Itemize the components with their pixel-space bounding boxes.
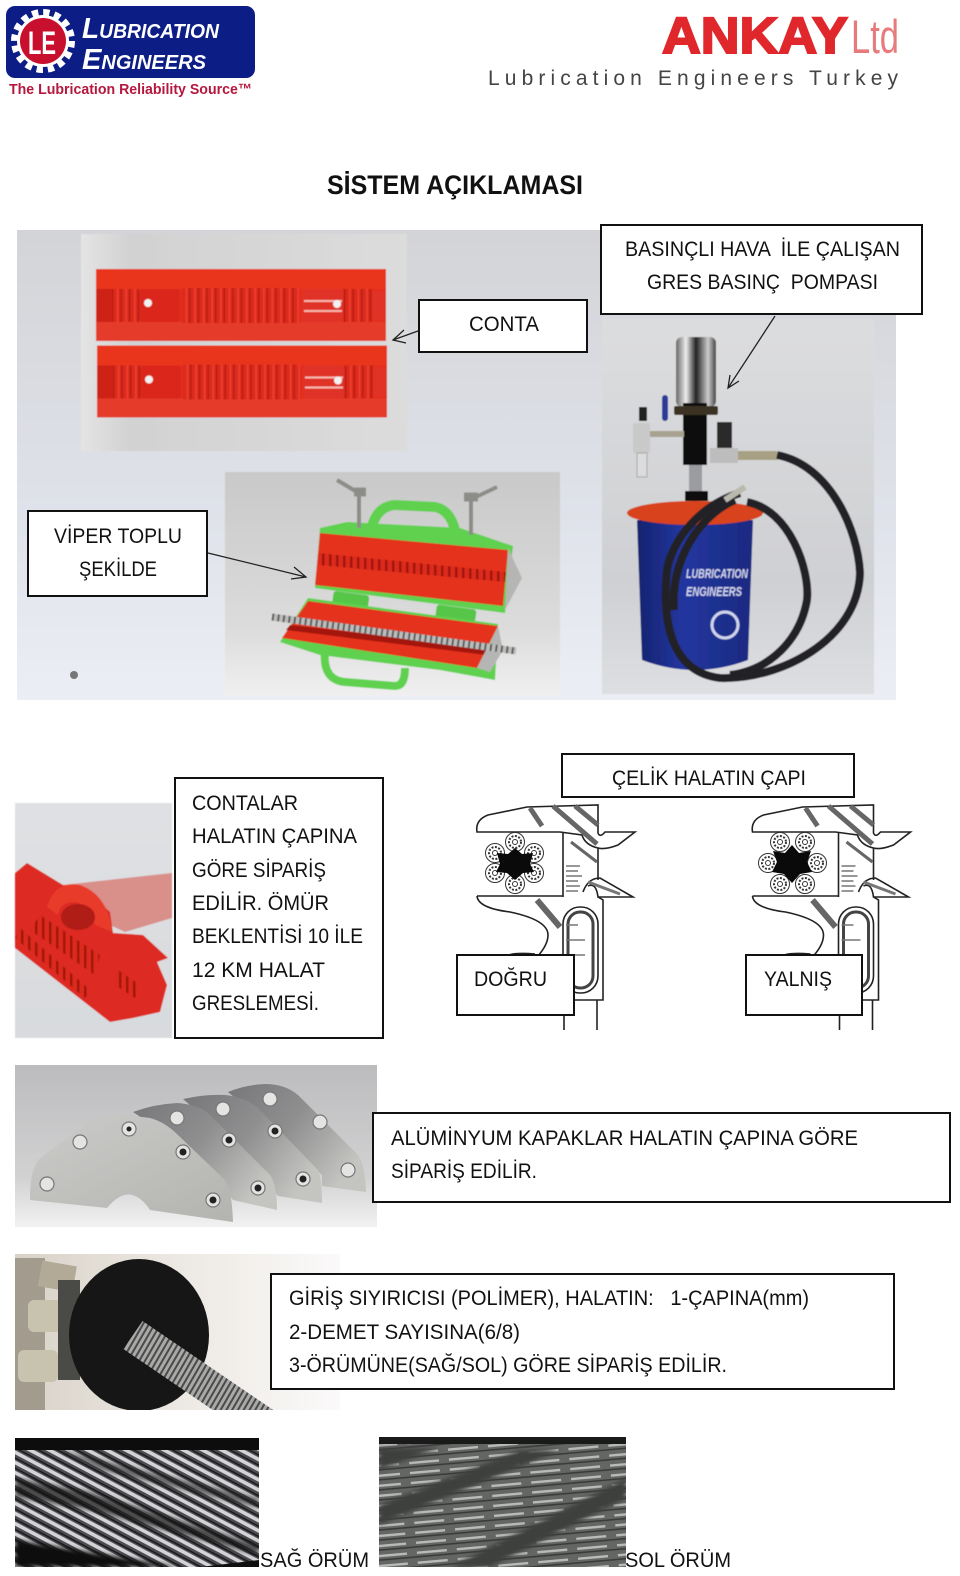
logo: Ankay Ltd: ANKAY xyxy=(662,7,848,64)
logo: Ankay Ltd xyxy=(488,7,899,90)
photo: seal housing with rope xyxy=(225,472,560,696)
black disc xyxy=(69,1259,209,1411)
photo: grease pump xyxy=(602,319,874,694)
outlet block xyxy=(710,448,738,463)
callout: viper xyxy=(28,511,207,596)
callout: conta xyxy=(419,300,587,352)
callout: seals: CONTALAR xyxy=(192,792,298,815)
callout: entry scraper: 2-DEMET SAYISINA(6/8) xyxy=(289,1321,520,1344)
pink back cylinder xyxy=(63,873,172,932)
arrow: conta xyxy=(393,330,418,343)
bucket xyxy=(637,520,753,670)
logo: Ankay Ltd: Lubrication Engineers Turkey xyxy=(488,67,898,90)
steel rope on housing xyxy=(272,617,516,651)
label: left lay: SOL ÖRÜM xyxy=(625,1549,731,1572)
logo: Ankay Ltd: Ltd xyxy=(851,10,899,63)
title: SİSTEM AÇIKLAMASI xyxy=(327,170,583,200)
callout: viper: ŞEKİLDE xyxy=(79,558,157,581)
panel background xyxy=(17,230,896,700)
red seal body xyxy=(15,863,168,1022)
label: right lay: SAĞ ÖRÜM xyxy=(260,1549,369,1572)
callout: seals xyxy=(175,778,383,1038)
cover holes xyxy=(40,1092,355,1207)
logo: Lubrication Engineers: LE xyxy=(28,25,56,61)
photo: grease pump: ENGINEERS xyxy=(686,584,742,599)
logo: Lubrication Engineers: ENGINEERS xyxy=(82,44,207,76)
red seal upper xyxy=(96,269,386,341)
callout: viper: VİPER TOPLU xyxy=(54,525,182,548)
photo: red seals xyxy=(81,234,407,451)
callout: conta: CONTA xyxy=(469,313,539,336)
rope section correct xyxy=(486,832,544,894)
callout: entry scraper xyxy=(271,1274,894,1389)
callout: aluminium covers: SİPARİŞ EDİLİR. xyxy=(391,1160,537,1183)
pump body xyxy=(676,337,716,407)
air regulator xyxy=(633,423,650,453)
green body lower xyxy=(280,598,498,680)
rope section wrong xyxy=(758,832,826,894)
green handle lower xyxy=(325,650,405,686)
arrow: pump xyxy=(728,316,775,388)
diagram: caliper correct xyxy=(477,805,635,1030)
photo: right lay rope xyxy=(15,1438,259,1567)
red seal lower xyxy=(97,346,387,418)
callout: correct: DOĞRU xyxy=(474,968,547,991)
callout: aluminium covers: ALÜMİNYUM KAPAKLAR HALATIN ÇAPINA GÖRE xyxy=(391,1127,858,1150)
wing screws xyxy=(337,480,497,535)
callout: wrong: YALNIŞ xyxy=(764,968,832,991)
hose xyxy=(666,455,860,678)
callout: seals: GRESLEMESİ. xyxy=(192,992,319,1015)
red face upper xyxy=(315,533,508,606)
logo: Lubrication Engineers xyxy=(6,6,255,98)
callout: aluminium covers xyxy=(373,1113,950,1202)
callout: seals: HALATIN ÇAPINA xyxy=(192,825,357,848)
logo: Lubrication Engineers: The Lubrication Reliability Source™ xyxy=(9,81,252,98)
callout: correct xyxy=(457,955,574,1015)
callout: seals: EDİLİR. ÖMÜR xyxy=(192,892,329,915)
clamps xyxy=(15,1258,45,1410)
photo: entry scraper xyxy=(15,1254,318,1410)
callout: entry scraper: 3-ÖRÜMÜNE(SAĞ/SOL) GÖRE SİPARİŞ EDİLİR. xyxy=(289,1354,727,1377)
callout: pump xyxy=(601,225,922,314)
logo: Lubrication Engineers: LUBRICATION xyxy=(82,13,220,45)
decorative dot marker xyxy=(70,671,78,679)
callout: pump: BASINÇLI HAVA İLE ÇALIŞAN xyxy=(625,238,900,261)
photo: red seal detail xyxy=(15,803,172,1038)
photo: aluminium covers xyxy=(15,1065,377,1227)
callout: wrong xyxy=(746,955,862,1015)
panel: system photos xyxy=(17,230,896,700)
bucket lid xyxy=(627,501,763,525)
hinges xyxy=(332,591,370,609)
red face lower xyxy=(282,601,498,668)
photo: grease pump: LUBRICATION xyxy=(686,566,748,581)
callout: seals: 12 KM HALAT xyxy=(192,959,325,982)
diagram: caliper wrong xyxy=(752,805,910,1030)
callout: pump: GRES BASINÇ POMPASI xyxy=(647,271,878,294)
arrow: viper xyxy=(208,553,306,579)
callout: seals: GÖRE SİPARİŞ xyxy=(192,859,326,882)
rope xyxy=(133,1335,265,1425)
callout: rope diameter: ÇELİK HALATIN ÇAPI xyxy=(612,767,806,790)
photo: left lay rope xyxy=(379,1437,626,1567)
red arch xyxy=(47,884,112,932)
callout: entry scraper: GİRİŞ SIYIRICISI (POLİMER), HALATIN: 1-ÇAPINA(mm) xyxy=(289,1287,809,1310)
callout: seals: BEKLENTİSİ 10 İLE xyxy=(192,925,363,948)
green body upper xyxy=(315,522,513,613)
green handle upper xyxy=(372,505,455,530)
callout: rope diameter xyxy=(562,754,854,797)
